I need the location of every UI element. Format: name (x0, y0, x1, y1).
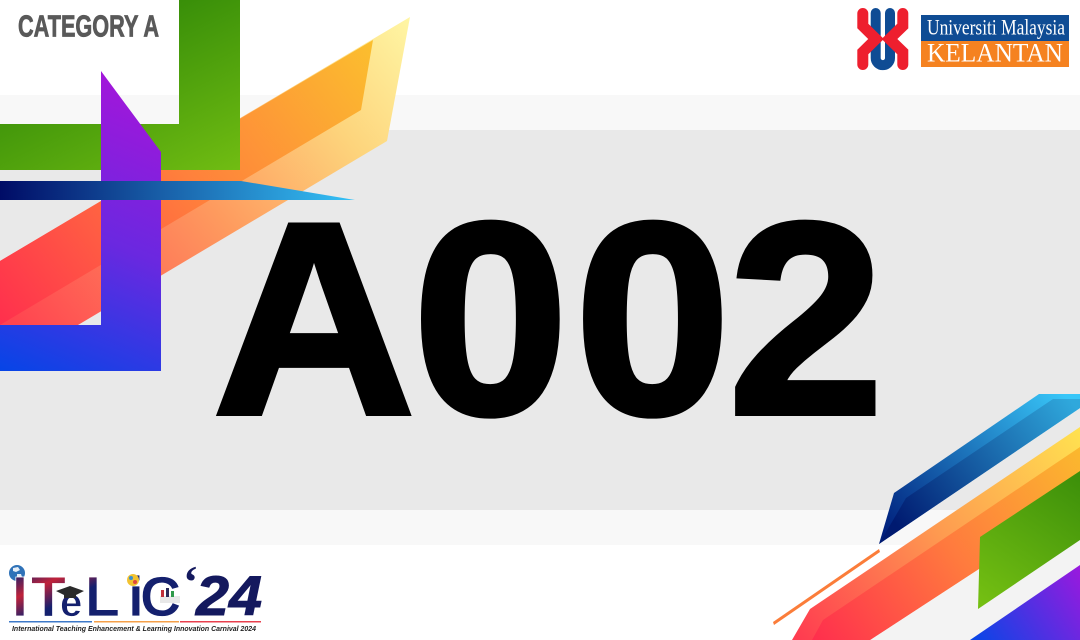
books and cart icon (160, 588, 180, 603)
logo tagline: International Teaching Enhancement & Learning Innovation Carnival 2024 (12, 626, 256, 633)
tri-colour underline (9, 621, 261, 622)
logo wordmark (921, 14, 1069, 68)
graduation cap icon (56, 586, 84, 598)
left decorative stripes (0, 17, 410, 325)
bottom right decorative stripes (773, 394, 1080, 640)
blue pointed bar (0, 181, 355, 200)
logo emblem (863, 13, 903, 65)
logo wordmark: KELANTAN (927, 38, 1063, 68)
green corner bracket (0, 0, 240, 170)
purple corner bracket (0, 71, 161, 371)
logo letters: ITeLiC (12, 565, 181, 629)
globe icon (9, 565, 25, 581)
apostrophe: ‘ (183, 556, 198, 607)
main code A002: A002 (213, 166, 884, 472)
year 24: 24 (195, 564, 262, 627)
category label: CATEGORY A (18, 8, 159, 44)
logo: Universiti Malaysia Kelantan (863, 13, 1069, 68)
light bulb icon (127, 574, 139, 586)
logo: iTeLiC 24 (9, 556, 262, 633)
